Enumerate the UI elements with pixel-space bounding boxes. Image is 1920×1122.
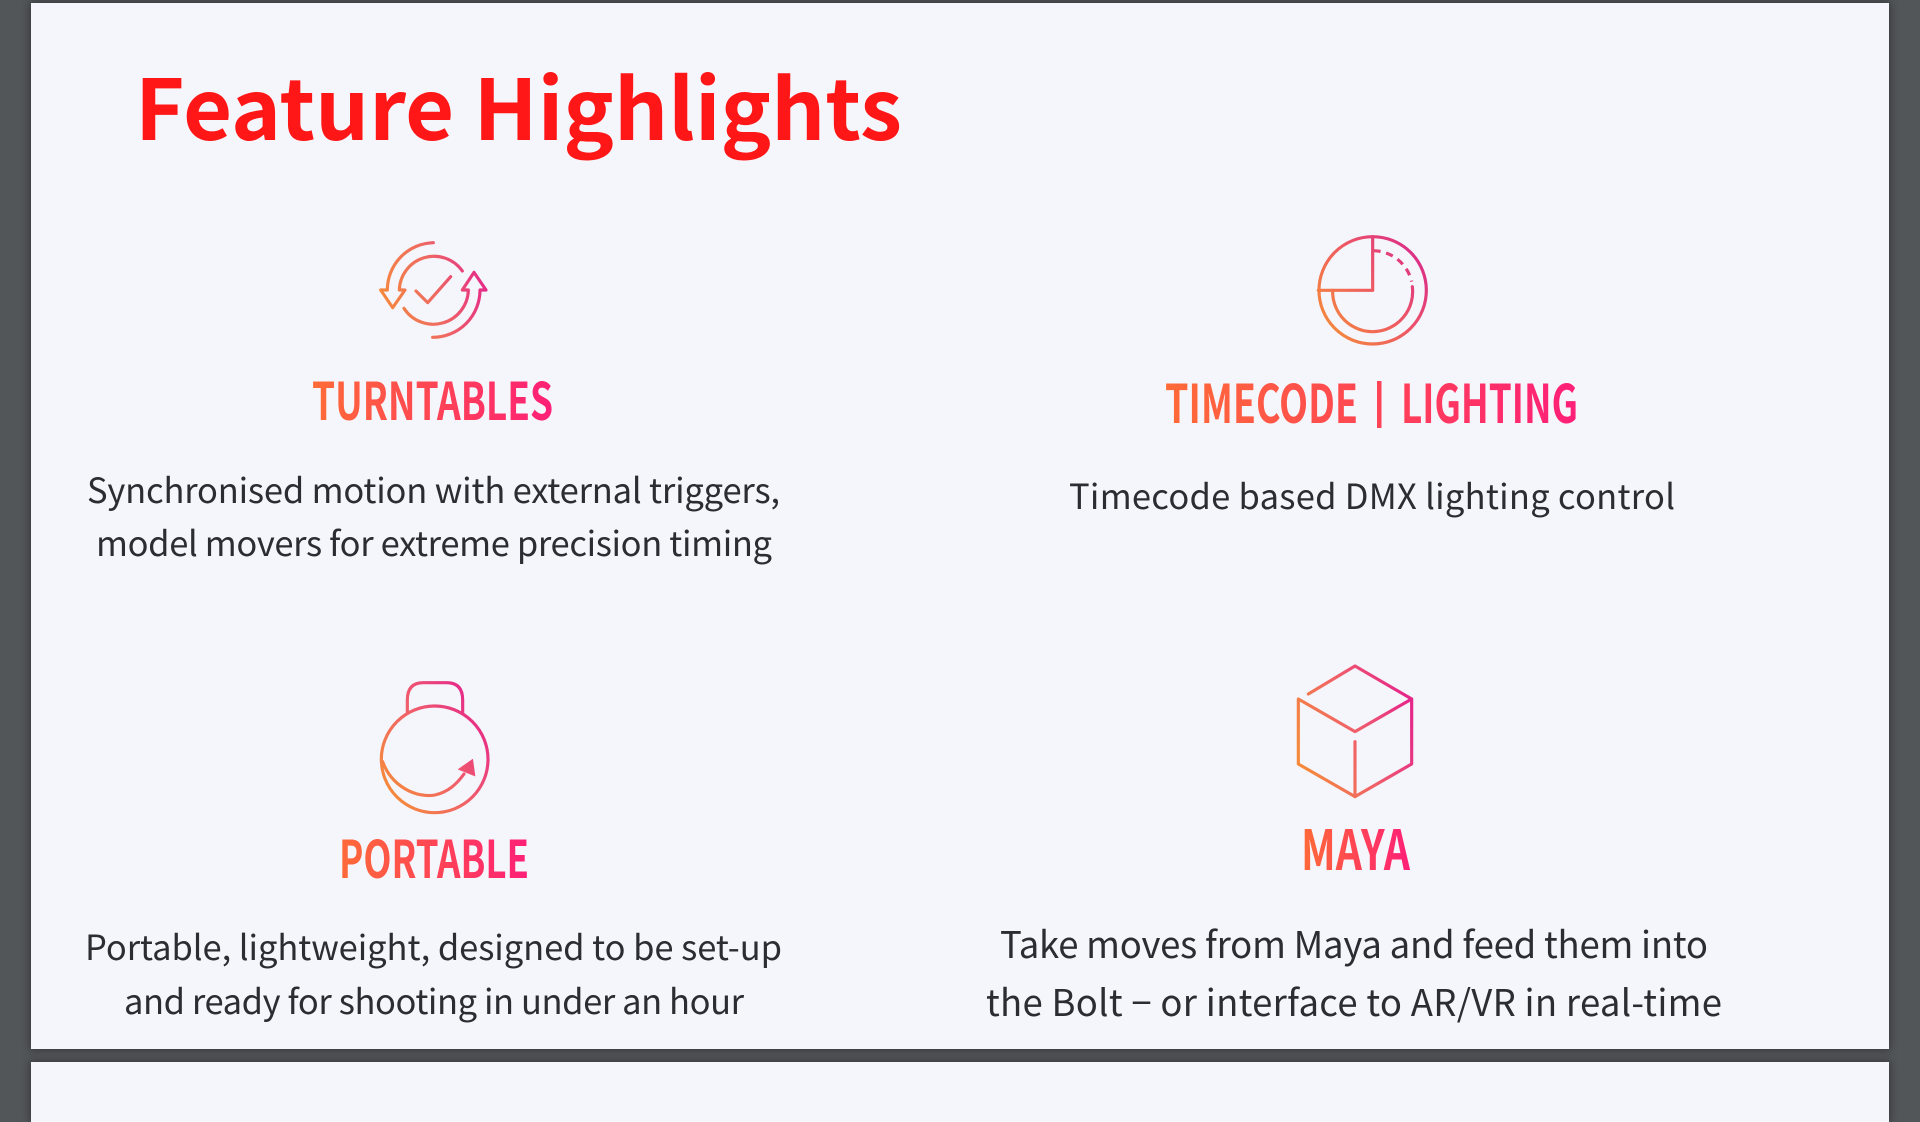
heading: maya: MAYA [1301,806,1411,886]
heading: turntables: TURNTABLES [312,360,553,435]
text: maya description: Take moves from Maya and feed them into [1000,916,1708,969]
panel: portable [85,683,782,1024]
icon: kettlebell with arrow [381,683,488,813]
text: turntables description: model movers for extreme precision timing [96,516,772,566]
icon: cube [1298,666,1412,797]
text: maya description [986,916,1722,1027]
title: Feature Highlights [135,44,902,165]
heading: timecode lighting: LIGHTING [1401,363,1578,439]
heading: timecode lighting: TIMECODE [1165,363,1358,439]
heading: timecode lighting [1165,363,1578,439]
text: timecode description: Timecode based DMX lighting control [1069,469,1675,519]
text: portable description [85,920,782,1024]
text: maya description: the Bolt − or interface to AR/VR in real-time [986,974,1722,1027]
panel: maya [986,666,1722,1027]
text: portable description: and ready for shooting in under an hour [124,974,745,1024]
panel: turntables [87,243,780,566]
text: turntables description: Synchronised motion with external triggers, [87,463,780,513]
icon: clock pie [1318,237,1426,344]
heading: portable: PORTABLE [339,818,529,893]
icon: sync arrows with check [381,243,486,337]
text: portable description: Portable, lightweight, designed to be set-up [85,920,782,970]
text: turntables description [87,463,780,566]
panel: timecode lighting [1069,237,1675,519]
panel: next page sheet [31,1062,1889,1122]
